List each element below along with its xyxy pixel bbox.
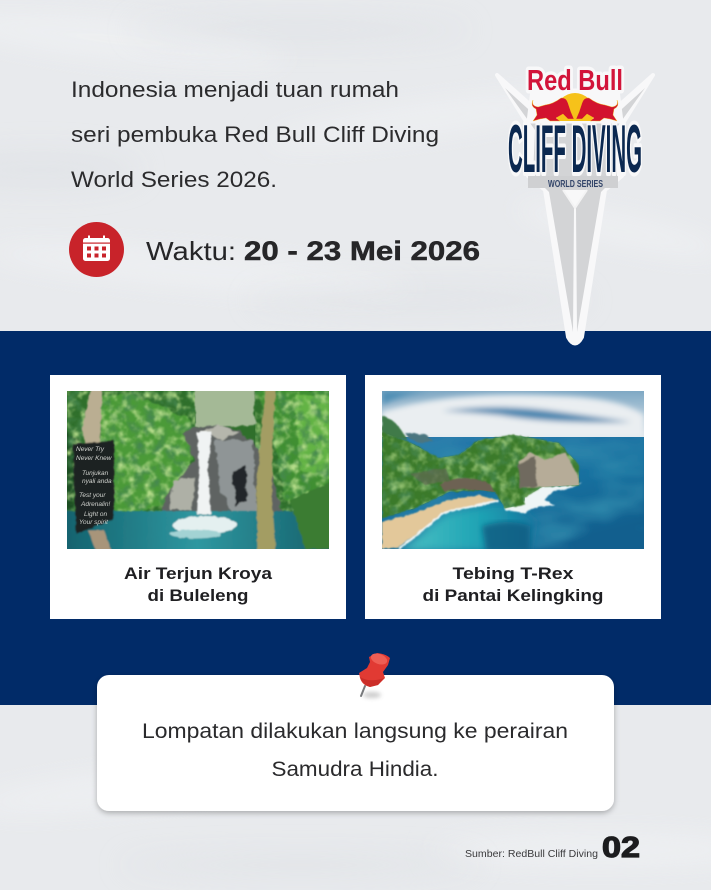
caption: di Pantai Kelingking bbox=[422, 586, 604, 605]
photo: chalkboard lettering: Tunjukan bbox=[82, 470, 109, 477]
date line: 20 - 23 Mei 2026 bbox=[244, 236, 480, 266]
caption bbox=[422, 564, 604, 605]
callout text bbox=[142, 720, 568, 781]
panel: callout bbox=[97, 675, 614, 811]
icon: red push pin bbox=[359, 651, 390, 698]
photo: chalkboard lettering: Never Try bbox=[76, 446, 105, 453]
photo: chalkboard lettering: Your spirit bbox=[79, 519, 109, 526]
logo white backing bbox=[528, 90, 622, 122]
logo trident shape bbox=[497, 75, 653, 344]
logo: sun disc bbox=[557, 93, 593, 121]
intro text: Indonesia menjadi tuan rumah bbox=[71, 77, 399, 102]
navy band bbox=[0, 331, 711, 705]
photo: chalkboard lettering bbox=[76, 446, 113, 526]
logo: Red Bull Cliff Diving World Series bbox=[497, 65, 653, 344]
intro text: seri pembuka Red Bull Cliff Diving bbox=[71, 122, 439, 147]
caption bbox=[124, 564, 273, 605]
photo: chalkboard lettering: Adrenalin! bbox=[80, 501, 110, 508]
photo: Kelingking cliff bbox=[382, 391, 644, 552]
photo: chalkboard lettering: nyali anda bbox=[82, 478, 112, 485]
intro text bbox=[71, 77, 439, 192]
caption: Air Terjun Kroya bbox=[124, 564, 273, 583]
panel: Tebing T-Rex bbox=[365, 375, 661, 619]
photo: chalkboard lettering: Light on bbox=[84, 511, 108, 518]
caption: Tebing T-Rex bbox=[452, 564, 574, 583]
callout text: Samudra Hindia. bbox=[272, 758, 438, 781]
logo: World Series: WORLD SERIES bbox=[548, 178, 603, 190]
logo: Red Bull wordmark: Red Bull bbox=[527, 65, 623, 97]
photo: chalkboard lettering: Never Knew bbox=[76, 455, 113, 462]
callout text: Lompatan dilakukan langsung ke perairan bbox=[142, 720, 568, 743]
source note: Sumber: RedBull Cliff Diving bbox=[465, 848, 598, 860]
photo: waterfall bbox=[67, 391, 329, 549]
date line bbox=[146, 236, 480, 266]
icon: calendar badge bbox=[69, 222, 124, 277]
panel: Air Terjun Kroya bbox=[50, 375, 346, 619]
photo: chalkboard lettering: Test your bbox=[79, 492, 106, 499]
date line: Waktu: bbox=[146, 236, 236, 266]
intro text: World Series 2026. bbox=[71, 167, 277, 192]
caption: di Buleleng bbox=[148, 586, 248, 605]
page number: 02 bbox=[602, 832, 640, 864]
logo: charging bulls bbox=[532, 98, 618, 121]
logo: grey world series band bbox=[528, 176, 618, 188]
